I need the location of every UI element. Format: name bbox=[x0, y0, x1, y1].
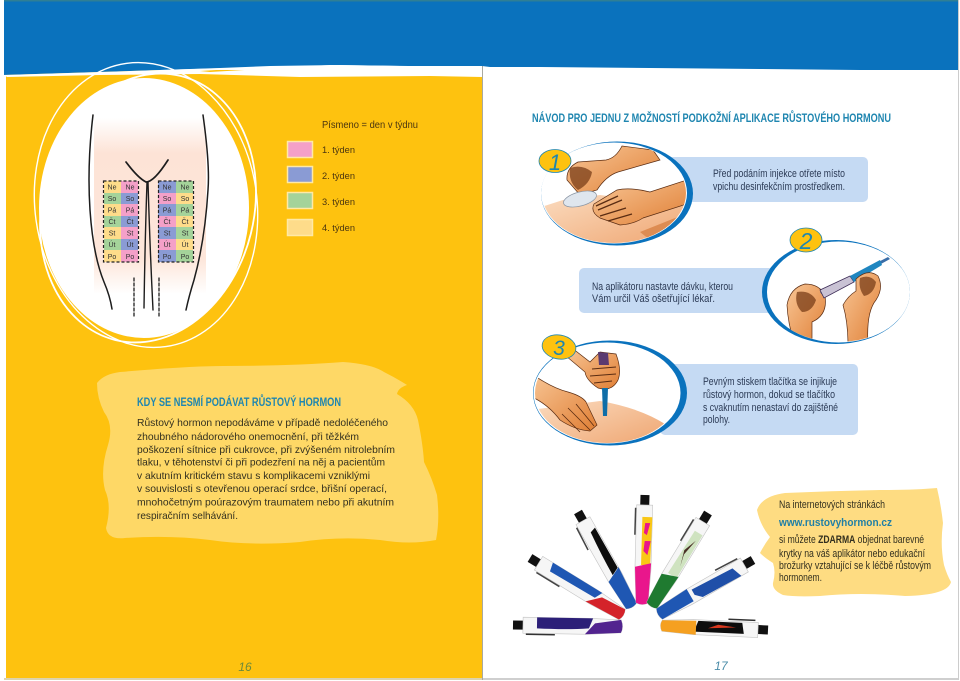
step 2 bbox=[579, 228, 910, 345]
step 2 number badge bbox=[790, 228, 822, 254]
illustration: thighs with injection sites bbox=[12, 48, 284, 366]
right thigh day grid: Po bbox=[163, 254, 171, 261]
legend item: week 3: 3. týden bbox=[322, 197, 355, 208]
panel heading: KDY SE NESMÍ PODÁVAT RŮSTOVÝ HORMON bbox=[137, 393, 341, 409]
pen: green bbox=[643, 508, 715, 611]
page number 16: 16 bbox=[238, 660, 252, 674]
panel body text bbox=[137, 417, 395, 522]
right thigh day grid: Čt bbox=[182, 217, 189, 226]
right thigh day grid: Čt bbox=[164, 217, 171, 226]
panel body text: respiračním selhávání. bbox=[137, 510, 238, 522]
step 3 callout: Pevným stiskem tlačítka se injikuje bbox=[703, 376, 837, 388]
panel body text: tlaku, v těhotenství či při podezření na něj a pacientům bbox=[137, 456, 385, 468]
right thigh day grid bbox=[158, 181, 194, 262]
left thigh day grid: Út bbox=[108, 240, 116, 249]
step 2 callout: Na aplikátoru nastavte dávku, kterou bbox=[592, 281, 733, 293]
offer text: si můžete ZDARMA objednat barevné bbox=[779, 534, 924, 546]
page number 17: 17 bbox=[714, 659, 729, 673]
left thigh day grid: Po bbox=[126, 254, 134, 261]
legend item: week 4: 4. týden bbox=[322, 223, 355, 234]
offer text: hormonem. bbox=[779, 572, 822, 584]
step 3 callout: růstový hormon, dokud se tlačítko bbox=[703, 389, 835, 401]
offer text: Na internetových stránkách bbox=[779, 499, 885, 511]
step 2 number badge: 2 bbox=[799, 228, 813, 254]
step 2 callout bbox=[579, 268, 774, 313]
step 3 illustration bbox=[530, 340, 687, 450]
step 1 callout: Před podáním injekce otřete místo bbox=[713, 168, 845, 180]
panel body text: zhoubného nádorového onemocnění, při těžkém bbox=[137, 431, 359, 443]
pens photo bbox=[513, 495, 768, 638]
panel body text: mnohočetným poúrazovým traumatem nebo při akutním bbox=[137, 496, 394, 508]
step 3 callout: polohy. bbox=[703, 414, 730, 426]
pen: purple bbox=[513, 617, 623, 636]
right thigh day grid: Út bbox=[182, 240, 189, 249]
legend heading: Písmeno = den v týdnu bbox=[322, 120, 418, 131]
step 1 callout: vpichu desinfekčním prostředkem. bbox=[713, 181, 845, 193]
left thigh day grid: Ne bbox=[126, 184, 135, 192]
right thigh day grid: So bbox=[163, 196, 171, 203]
panel body text: poškození sítnice při cukrovce, při zvýšeném nitrolebním bbox=[137, 444, 395, 456]
offer text: krytky na váš aplikátor nebo edukační bbox=[779, 548, 925, 560]
right thigh day grid: St bbox=[164, 230, 170, 238]
offer text bbox=[778, 499, 931, 584]
right thigh day grid: Po bbox=[181, 254, 189, 261]
step 2 illustration bbox=[762, 240, 910, 345]
right thigh day grid: Pá bbox=[163, 208, 171, 214]
left thigh day grid: Pá bbox=[126, 208, 134, 214]
legend item: week 2: 2. týden bbox=[322, 171, 355, 182]
legend: weeks bbox=[288, 120, 418, 236]
pen: red bbox=[525, 551, 628, 623]
step 1 illustration bbox=[538, 142, 693, 250]
skin shading bbox=[94, 118, 206, 294]
step 1 number badge: 1 bbox=[549, 150, 561, 175]
white ellipse with rings bbox=[12, 48, 284, 366]
right thigh day grid: Ne bbox=[181, 184, 190, 192]
right thigh day grid: St bbox=[182, 230, 188, 238]
step 1 callout bbox=[660, 157, 868, 202]
panel body text: v souvislosti s otevřenou operací srdce, břišní operací, bbox=[137, 483, 387, 495]
step 3 callout bbox=[660, 364, 858, 435]
left thigh day grid: Út bbox=[126, 240, 134, 249]
right thigh day grid: Pá bbox=[181, 208, 189, 214]
left thigh day grid: Pá bbox=[108, 208, 116, 214]
right thigh day grid: So bbox=[181, 196, 189, 203]
pen: blue bbox=[653, 551, 757, 622]
legend item: week 1: 1. týden bbox=[322, 145, 355, 156]
left thigh day grid: Čt bbox=[108, 217, 116, 226]
panel: contraindications bbox=[97, 362, 438, 544]
left thigh day grid bbox=[104, 181, 138, 262]
left thigh day grid: Čt bbox=[126, 217, 134, 226]
step 1 bbox=[538, 142, 868, 250]
step 2 callout: Vám určil Váš ošetřující lékař. bbox=[592, 293, 715, 305]
left thigh day grid: Ne bbox=[108, 184, 117, 192]
pen: pink bbox=[633, 495, 653, 605]
step 1 number badge bbox=[539, 150, 571, 175]
panel: website offer bbox=[757, 488, 951, 596]
step 3 number badge bbox=[540, 332, 578, 362]
offer text: www.rustovyhormon.cz bbox=[778, 517, 892, 529]
panel body text: Růstový hormon nepodáváme v případě nedoléčeného bbox=[137, 417, 388, 429]
top blue band bbox=[4, 0, 958, 77]
left thigh day grid: So bbox=[126, 196, 134, 203]
pen: orange bbox=[660, 616, 768, 638]
panel body text: v akutním kritickém stavu s komplikacemi vzniklými bbox=[137, 470, 370, 482]
right thigh day grid: Ne bbox=[163, 184, 172, 192]
pen: blue and black bbox=[569, 508, 639, 612]
step 3 callout: s cvaknutím nenastaví do zajištěné bbox=[703, 402, 838, 414]
step 3 number badge: 3 bbox=[553, 337, 565, 360]
body contour lines bbox=[89, 115, 208, 317]
left thigh day grid: So bbox=[108, 196, 116, 203]
left thigh day grid: St bbox=[127, 230, 133, 238]
left thigh day grid: St bbox=[109, 230, 115, 238]
left thigh day grid: Po bbox=[108, 254, 116, 261]
right thigh day grid: Út bbox=[164, 240, 171, 249]
step 3 bbox=[530, 332, 858, 450]
